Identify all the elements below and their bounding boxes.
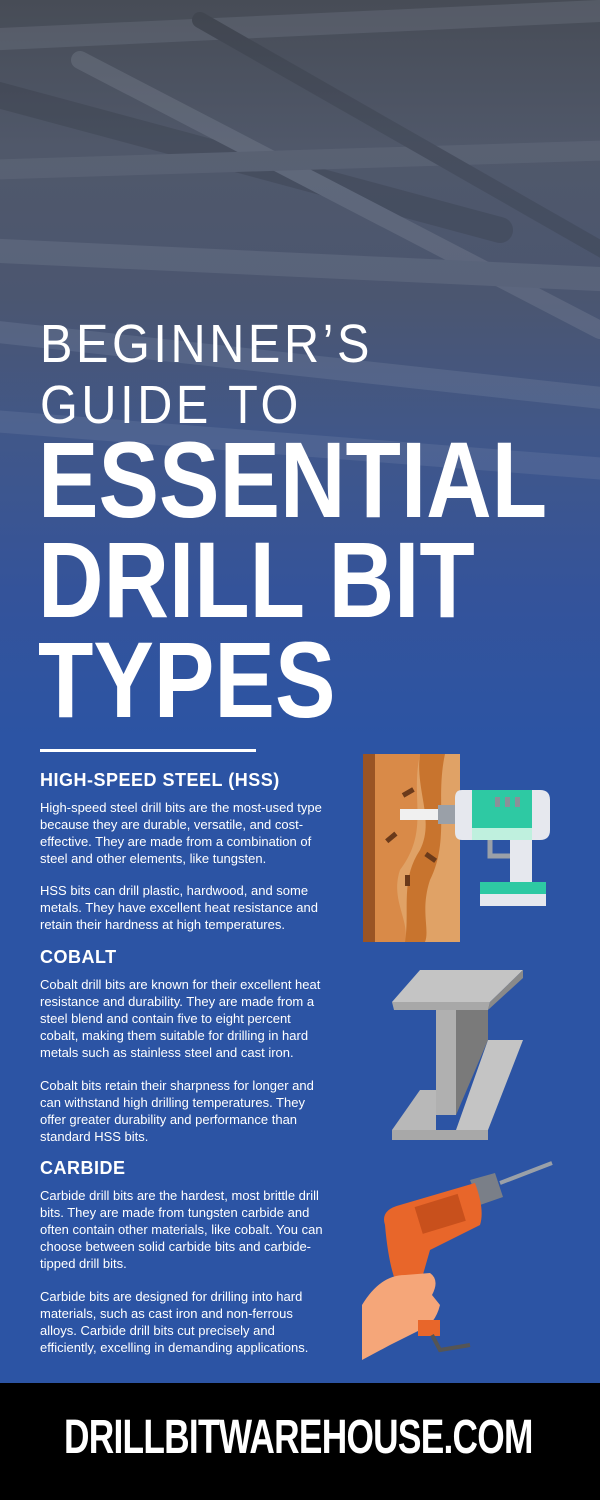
section: cobalt: Cobalt drill bits are known for their excellent heat resistance and durability. They are made from a steel blend and contain five to eight percent cobalt, making them suitable for drilling in hard metals such as stainless steel and cast iron. (40, 977, 320, 1060)
header photo background (0, 0, 600, 740)
section: cobalt (40, 947, 320, 1144)
title: TYPES (38, 619, 335, 740)
section: HSS: HSS bits can drill plastic, hardwood, and some metals. They have excellent heat resistance and retain their hardness at high temperatures. (40, 883, 318, 932)
section: carbide: Carbide drill bits are the hardest, most brittle drill bits. They are made from tungsten carbide and often contain other materials, like cobalt. You can choose between solid carbide bits and carbide-tipped drill bits. (40, 1188, 323, 1271)
footer url: DRILLBITWAREHOUSE.COM (64, 1411, 533, 1464)
section: carbide (40, 1158, 323, 1355)
title: GUIDE TO (40, 375, 302, 435)
title: BEGINNER’S (40, 314, 373, 374)
section: HSS: High-speed steel drill bits are the most-used type because they are durable, versatile, and cost-effective. They are made from a combination of steel and other elements, like tungsten. (40, 800, 322, 866)
title: ESSENTIAL (38, 419, 547, 540)
section: HSS (40, 770, 322, 932)
icon: steel I-beam (392, 970, 523, 1140)
icon: wood and cordless drill (363, 754, 550, 942)
title: DRILL BIT (38, 519, 475, 640)
footer (0, 1383, 600, 1500)
section: cobalt: Cobalt bits retain their sharpness for longer and can withstand high drilling temperatures. They offer greater durability and performance than standard HSS bits. (40, 1078, 314, 1144)
section: HSS: HIGH-SPEED STEEL (HSS) (40, 770, 280, 790)
section: carbide: Carbide bits are designed for drilling into hard materials, such as cast iron and non-ferrous alloys. Carbide drill bits cut precisely and efficiently, excelling in demanding applications. (40, 1289, 308, 1355)
icon: hand holding drill (362, 1161, 553, 1360)
section: cobalt: COBALT (40, 947, 117, 967)
title (38, 314, 547, 740)
section: carbide: CARBIDE (40, 1158, 126, 1178)
divider (40, 749, 256, 752)
